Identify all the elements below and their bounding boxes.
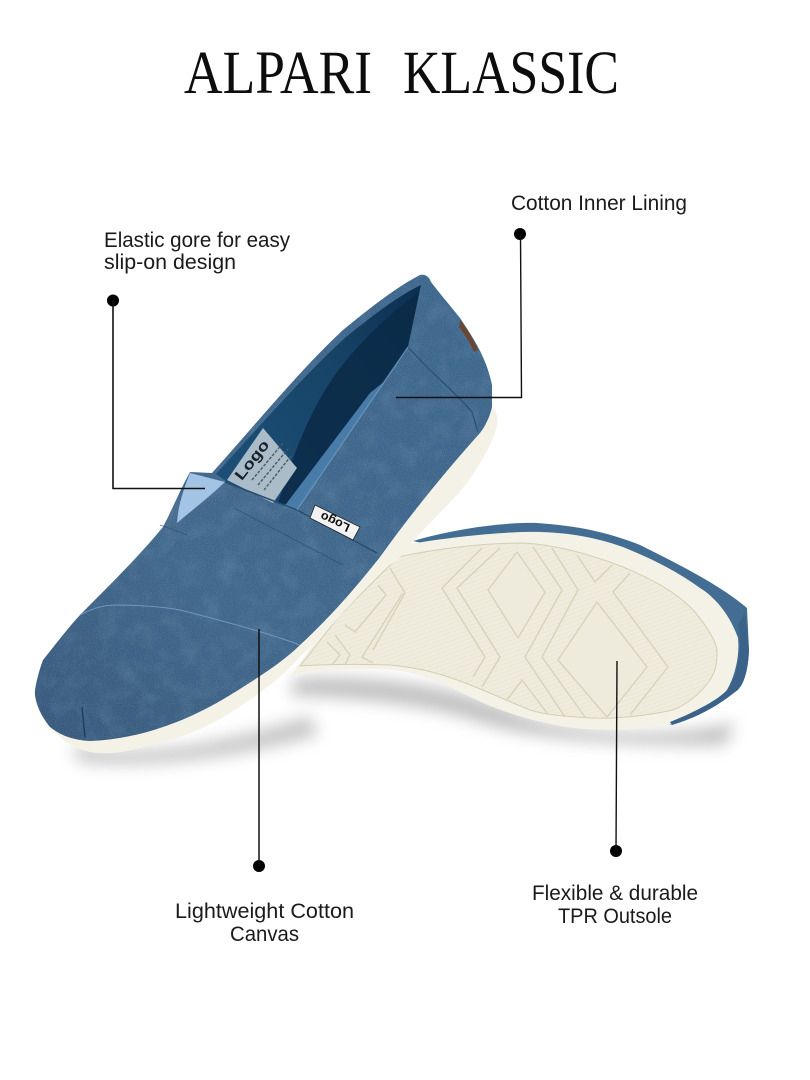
tread pattern	[327, 547, 668, 717]
callout: elastic gore	[104, 228, 290, 488]
callout: canvas: Lightweight Cotton	[175, 899, 354, 923]
insole label: Logo	[232, 437, 273, 484]
inner light strip	[283, 381, 385, 510]
front shoe outsole	[50, 408, 497, 753]
heel leather tag	[459, 320, 478, 352]
elastic gore triangle	[177, 473, 225, 523]
callout: cotton lining: Cotton Inner Lining	[511, 191, 687, 215]
callout: outsole: Flexible & durable	[532, 881, 698, 905]
rear shoe canvas far edge	[670, 612, 749, 725]
title: KLASSIC	[403, 40, 619, 107]
shoe lining	[216, 285, 421, 510]
side logo tag: Logo	[318, 509, 352, 535]
callout: outsole: TPR Outsole	[558, 904, 672, 928]
callout: elastic gore: slip-on design	[104, 250, 236, 274]
callout: elastic gore: Elastic gore for easy	[104, 228, 290, 252]
callout: outsole	[532, 661, 698, 928]
vamp top edge	[225, 482, 377, 553]
callout: cotton lining	[396, 191, 687, 398]
vamp stitch lines	[160, 508, 343, 565]
rear shoe outsole rim	[290, 532, 738, 730]
rear shoe tread	[300, 543, 717, 718]
callout: canvas: Canvas	[230, 922, 299, 946]
rear shoe canvas edge	[413, 523, 749, 725]
lining inner shadow	[278, 292, 419, 505]
side logo tag	[310, 505, 360, 540]
front shoe canvas	[35, 275, 492, 741]
toe stitch	[82, 707, 85, 737]
title	[184, 40, 619, 107]
heel seam	[408, 347, 478, 432]
ground shadows	[70, 677, 735, 764]
toe cap seam	[80, 605, 300, 645]
canvas texture	[35, 275, 492, 741]
insole label	[227, 428, 297, 503]
quarter edge	[297, 347, 408, 510]
title: ALPARI	[184, 40, 372, 107]
canvas mottling	[35, 275, 492, 741]
front shoe	[35, 275, 497, 753]
callout: canvas	[175, 629, 354, 946]
rear shoe	[290, 523, 749, 730]
